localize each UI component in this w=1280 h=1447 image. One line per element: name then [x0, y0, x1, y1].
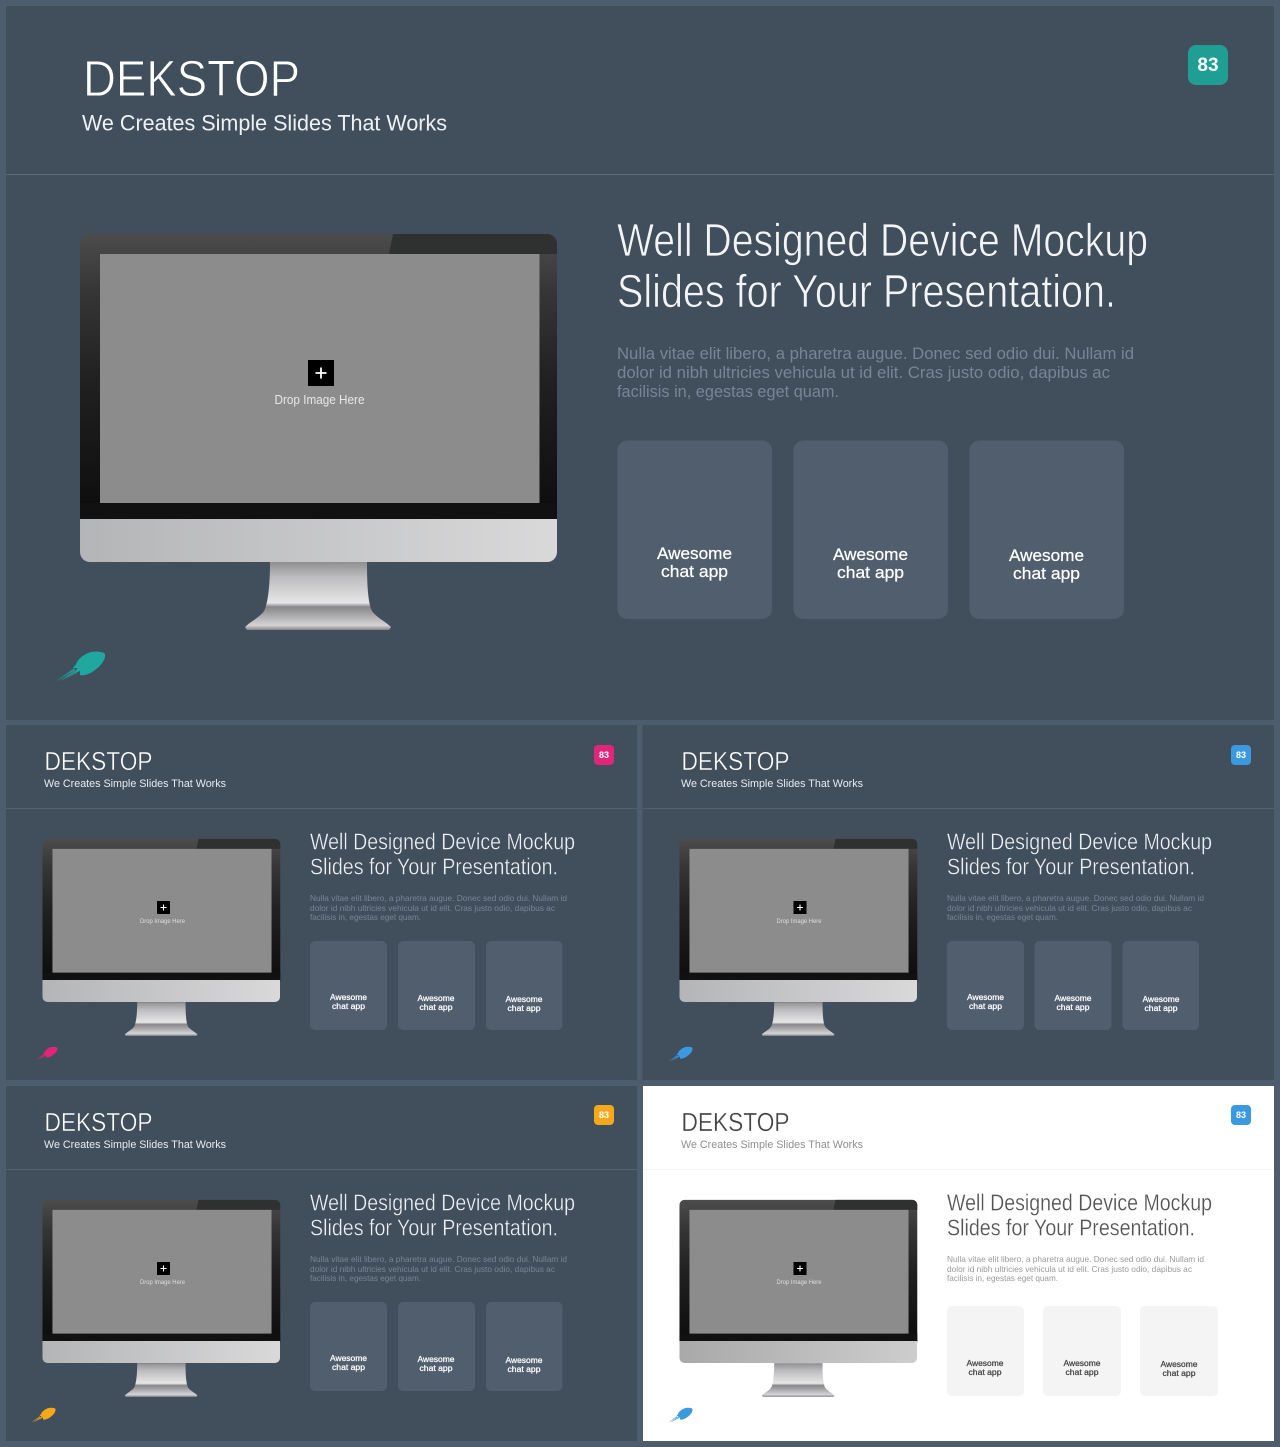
card 3	[1122, 941, 1199, 1030]
card 1	[310, 941, 387, 1030]
panel: orange slide	[6, 1086, 637, 1441]
page number badge	[594, 745, 614, 765]
card 1: Awesome	[967, 992, 1004, 1002]
icon: rocket	[55, 652, 105, 682]
card 1: chat app	[661, 562, 728, 581]
title: DEKSTOP	[682, 748, 790, 776]
body text: facilisis in, egestas eget quam.	[947, 1274, 1058, 1283]
body text	[310, 1255, 567, 1283]
title: DEKSTOP	[44, 1109, 152, 1137]
card 1: Awesome	[330, 1353, 367, 1363]
heading	[947, 828, 1212, 880]
desktop monitor mockup	[679, 1200, 917, 1397]
heading: Slides for Your Presentation.	[947, 854, 1195, 880]
page number badge	[1188, 45, 1228, 85]
card 3: Awesome	[1009, 546, 1084, 565]
monitor chins	[42, 519, 917, 1363]
subtitle: We Creates Simple Slides That Works	[44, 778, 226, 790]
card 1: Awesome	[657, 544, 732, 563]
body text: Nulla vitae elit libero, a pharetra augue. Donec sed odio dui. Nullam id	[310, 894, 567, 903]
desktop monitor mockup	[42, 1200, 280, 1397]
card 2: Awesome	[418, 993, 455, 1003]
card 2: Awesome	[1054, 993, 1092, 1003]
body text: facilisis in, egestas eget quam.	[310, 1274, 421, 1283]
card 2	[398, 1302, 475, 1391]
heading: Well Designed Device Mockup	[310, 828, 575, 854]
card 2	[1034, 941, 1112, 1030]
subtitle: We Creates Simple Slides That Works	[681, 1139, 863, 1151]
desktop monitor mockup	[679, 839, 917, 1036]
heading: Slides for Your Presentation.	[310, 1214, 558, 1240]
subtitle: We Creates Simple Slides That Works	[82, 110, 447, 136]
title: DEKSTOP	[44, 748, 152, 776]
drop image label: Drop Image Here	[776, 918, 822, 925]
body text	[947, 1255, 1204, 1283]
page number badge: 83	[1197, 55, 1219, 76]
body text: Nulla vitae elit libero, a pharetra augue. Donec sed odio dui. Nullam id	[947, 894, 1204, 903]
title: DEKSTOP	[83, 50, 300, 107]
page number badge	[594, 1105, 614, 1125]
card 3	[486, 941, 562, 1030]
page number badge: 83	[599, 1110, 609, 1120]
heading	[947, 1190, 1212, 1240]
body text: dolor id nibh ultricies vehicula ut id elit. Cras justo odio, dapibus ac	[310, 904, 555, 913]
card 1	[618, 440, 772, 619]
card 3	[486, 1302, 562, 1391]
heading	[617, 214, 1148, 317]
card 3: chat app	[508, 1364, 541, 1374]
icon: rocket	[30, 1408, 56, 1423]
body text: facilisis in, egestas eget quam.	[617, 383, 839, 401]
icon: plus	[794, 901, 806, 914]
body text: Nulla vitae elit libero, a pharetra augue. Donec sed odio dui. Nullam id	[310, 1255, 567, 1264]
body text: dolor id nibh ultricies vehicula ut id elit. Cras justo odio, dapibus ac	[310, 1265, 555, 1274]
card 1	[947, 1306, 1024, 1396]
card 3	[1140, 1306, 1218, 1396]
page number badge: 83	[599, 750, 609, 760]
heading: Slides for Your Presentation.	[310, 854, 558, 880]
card 3	[970, 440, 1124, 619]
body text	[617, 345, 1134, 401]
heading: Slides for Your Presentation.	[617, 265, 1116, 317]
drop image label: Drop Image Here	[776, 1279, 822, 1286]
card 1: chat app	[969, 1001, 1002, 1011]
heading: Well Designed Device Mockup	[617, 214, 1148, 266]
card 2	[398, 941, 475, 1030]
card 2: chat app	[837, 563, 904, 582]
panel: blue slide	[642, 725, 1274, 1080]
subtitle: We Creates Simple Slides That Works	[681, 778, 863, 790]
heading: Well Designed Device Mockup	[947, 828, 1212, 854]
card 1: chat app	[332, 1362, 365, 1372]
drop image label: Drop Image Here	[140, 1279, 186, 1286]
card 2: Awesome	[1064, 1358, 1101, 1368]
card 1: chat app	[968, 1367, 1002, 1377]
desktop monitor mockup	[80, 234, 557, 630]
card 2: chat app	[420, 1002, 453, 1012]
card 3: Awesome	[1160, 1359, 1198, 1369]
body text	[310, 894, 567, 922]
card 1	[310, 1302, 387, 1391]
title: DEKSTOP	[682, 1109, 790, 1137]
body text	[947, 894, 1204, 922]
card 3: chat app	[1162, 1368, 1196, 1378]
page number badge	[1231, 1105, 1251, 1125]
card 1: Awesome	[966, 1358, 1004, 1368]
subtitle: We Creates Simple Slides That Works	[44, 1139, 226, 1151]
card 3: chat app	[508, 1003, 541, 1013]
icon: rocket	[35, 1047, 58, 1060]
icon: plus	[157, 901, 170, 914]
drop image label: Drop Image Here	[274, 392, 364, 407]
card 1: chat app	[332, 1001, 365, 1011]
body text: Nulla vitae elit libero, a pharetra augue. Donec sed odio dui. Nullam id	[947, 1255, 1204, 1264]
drop image label: Drop Image Here	[140, 918, 186, 925]
icon: plus	[308, 360, 334, 386]
page number badge: 83	[1236, 750, 1246, 760]
card 2: chat app	[1056, 1002, 1090, 1012]
panel: pink slide	[6, 725, 637, 1080]
body text: facilisis in, egestas eget quam.	[310, 913, 421, 922]
body text: dolor id nibh ultricies vehicula ut id elit. Cras justo odio, dapibus ac	[617, 364, 1110, 382]
panel: main slide	[6, 6, 1274, 720]
card 3: chat app	[1013, 564, 1080, 583]
heading: Well Designed Device Mockup	[310, 1190, 575, 1216]
card 3: chat app	[1144, 1003, 1178, 1013]
card 2: Awesome	[418, 1354, 455, 1364]
heading	[310, 828, 575, 880]
card 2: chat app	[420, 1363, 453, 1373]
icon: rocket	[668, 1408, 693, 1423]
page number badge	[1231, 745, 1251, 765]
icon: rocket	[668, 1047, 693, 1062]
card 1	[947, 941, 1024, 1030]
body text: dolor id nibh ultricies vehicula ut id elit. Cras justo odio, dapibus ac	[947, 904, 1192, 913]
icon: plus	[794, 1262, 806, 1275]
panel: white slide	[643, 1086, 1274, 1441]
page number badge: 83	[1236, 1110, 1246, 1120]
card 2: chat app	[1066, 1367, 1099, 1377]
card 2	[1043, 1306, 1121, 1396]
desktop monitor mockup	[42, 839, 280, 1036]
card 3: Awesome	[506, 1355, 543, 1365]
card 2: Awesome	[833, 545, 908, 564]
card 1: Awesome	[330, 992, 367, 1002]
heading: Well Designed Device Mockup	[947, 1190, 1212, 1216]
icon: plus	[157, 1262, 170, 1275]
card 2	[794, 440, 948, 619]
body text: dolor id nibh ultricies vehicula ut id elit. Cras justo odio, dapibus ac	[947, 1265, 1192, 1274]
heading: Slides for Your Presentation.	[947, 1214, 1195, 1240]
card 3: Awesome	[506, 994, 543, 1004]
body text: facilisis in, egestas eget quam.	[947, 913, 1058, 922]
body text: Nulla vitae elit libero, a pharetra augue. Donec sed odio dui. Nullam id	[617, 345, 1134, 363]
card 3: Awesome	[1142, 994, 1180, 1004]
heading	[310, 1190, 575, 1240]
